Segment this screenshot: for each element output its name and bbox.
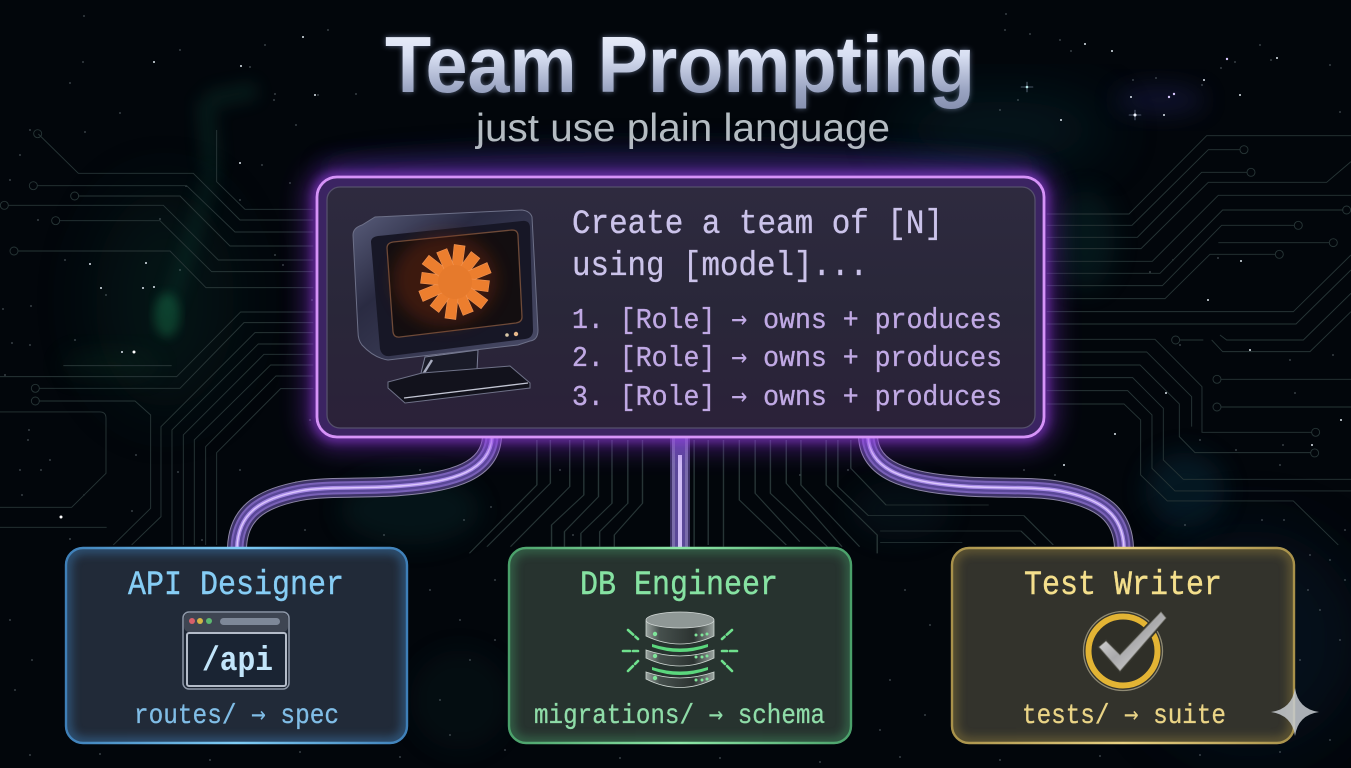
heading: API Designer: API Designer bbox=[128, 567, 344, 605]
prompt text: 3. [Role] → owns + produces bbox=[572, 378, 1002, 414]
panel: DB Engineer bbox=[509, 548, 851, 743]
prompt text: using [model]... bbox=[572, 248, 868, 286]
connector: main panel to API Designer bbox=[237, 437, 492, 548]
prompt text: Create a team of [N] bbox=[572, 206, 943, 244]
panel: Test Writer bbox=[952, 548, 1294, 743]
connector: main panel to DB Engineer bbox=[670, 437, 690, 548]
title: Team Prompting bbox=[385, 20, 975, 109]
caption: tests to suite: tests/ → suite bbox=[1022, 697, 1226, 732]
icon: api window: /api bbox=[202, 643, 273, 681]
icon: database bbox=[623, 612, 737, 688]
panel: API Designer bbox=[66, 548, 407, 743]
circuit traces: right bbox=[1047, 136, 1351, 545]
title: Team Prompting bbox=[385, 20, 975, 109]
heading: Test Writer: Test Writer bbox=[1024, 567, 1222, 605]
icon: check badge bbox=[1084, 612, 1166, 690]
panel: main prompt bbox=[317, 177, 1044, 437]
prompt text: 1. [Role] → owns + produces bbox=[572, 301, 1002, 337]
caption: routes to spec: routes/ → spec bbox=[134, 697, 339, 732]
circuit traces: centre bbox=[469, 440, 1053, 553]
caption: migrations to schema: migrations/ → schema bbox=[534, 697, 825, 732]
subtitle: just use plain language bbox=[475, 107, 890, 150]
prompt text bbox=[572, 206, 1002, 414]
heading: DB Engineer: DB Engineer bbox=[580, 567, 778, 605]
icon: corner sparkle bbox=[1271, 688, 1319, 736]
icon: api window bbox=[183, 612, 289, 689]
prompt text: 2. [Role] → owns + produces bbox=[572, 339, 1002, 375]
icon: monitor with orange asterisk bbox=[353, 210, 538, 403]
connector: main panel to Test Writer bbox=[868, 437, 1124, 548]
circuit traces: left bbox=[0, 130, 313, 545]
